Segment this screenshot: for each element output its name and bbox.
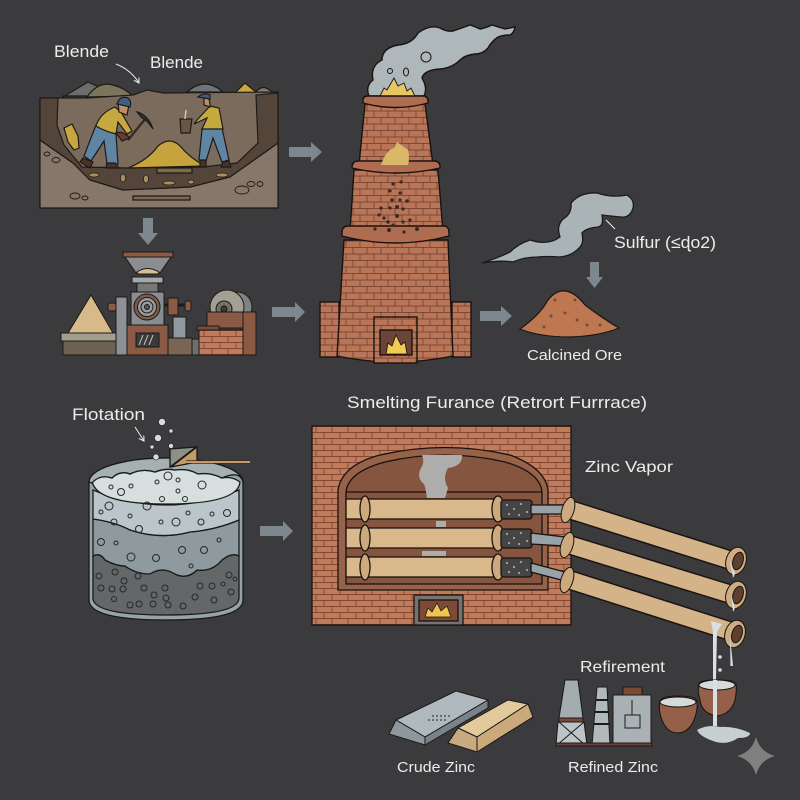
converter tower [556, 680, 587, 745]
middle retort [346, 525, 565, 551]
middle condenser [557, 531, 750, 611]
panel: flotation tank [89, 418, 250, 620]
label: Zinc Vapor: Zinc Vapor [585, 459, 674, 476]
arrow: pit to roaster [289, 142, 322, 162]
smoke bubbles [388, 52, 431, 76]
motor unit [164, 298, 199, 355]
tank shell [89, 458, 243, 620]
planks [133, 168, 192, 200]
panel: retort furnace [312, 426, 571, 625]
chimney column [592, 687, 610, 745]
smoke plume [368, 25, 515, 96]
zinc pour into pot [713, 680, 717, 726]
arch chamber [346, 455, 542, 584]
bubbles [96, 472, 237, 609]
label: Refirement: Refirement [580, 659, 666, 676]
middle layer [93, 519, 239, 576]
base line [556, 743, 652, 746]
sparkle mark [737, 737, 775, 775]
middle tower section [350, 170, 443, 232]
dark rock band [40, 93, 278, 190]
arrow: crusher to roaster [272, 302, 305, 322]
label: Calcined Ore: Calcined Ore [527, 347, 622, 364]
lower condenser [557, 566, 749, 650]
arrow: sulfur to calcined ore [586, 262, 603, 288]
upper tower section [359, 104, 433, 165]
pit ground [40, 90, 278, 208]
heading: smelting furnace: Smelting Furance (Retrort Furrrace) [347, 393, 647, 412]
label: Flotation: Flotation [72, 405, 145, 424]
foam surface [92, 469, 240, 504]
lower retort [346, 554, 565, 581]
sand pile on platform [61, 295, 116, 355]
ore vein [64, 124, 79, 150]
ingot: refined zinc [448, 700, 533, 752]
furnace vapor [419, 455, 462, 556]
arrow: roaster to calcined ore [480, 306, 512, 326]
support column [116, 297, 127, 355]
rim [89, 458, 243, 483]
ore particles [373, 180, 419, 234]
pointer arrow: Blende [116, 64, 139, 83]
foreground soil [40, 140, 278, 208]
lower tower section [337, 240, 453, 362]
puddle [697, 726, 750, 743]
flywheel on brick base [197, 290, 256, 355]
panel: crushing machinery [61, 252, 256, 355]
molten zinc drips [711, 560, 735, 680]
panel: roasting tower [320, 25, 515, 363]
panel: sulfur smoke [482, 193, 633, 263]
label: Blende (second): Blende [150, 53, 203, 72]
upper retort [346, 496, 565, 522]
side walls [320, 302, 471, 357]
distillation cabinet [613, 687, 651, 745]
pebbles [44, 152, 263, 200]
label: Blende (top left): Blende [54, 42, 109, 61]
rising bubbles [150, 418, 174, 460]
spoil heaps [63, 82, 273, 97]
hopper [123, 252, 173, 292]
arch frame [338, 448, 548, 590]
arrow: pit to crusher [138, 218, 158, 245]
chamber line [346, 491, 542, 493]
ring bands [342, 96, 449, 243]
label: Crude Zinc: Crude Zinc [397, 759, 476, 776]
back pot [698, 680, 736, 716]
flames at tower mouth [379, 78, 416, 98]
flame glow [381, 142, 409, 165]
label: Refined Zinc: Refined Zinc [568, 759, 659, 776]
crusher body and wheel [108, 292, 168, 355]
ingot: crude zinc [389, 691, 488, 745]
firebox [374, 317, 417, 363]
pointer: sulfur label [606, 220, 615, 229]
bottom sludge layer [93, 555, 239, 615]
ore heap [128, 141, 205, 168]
firebox [414, 595, 463, 625]
condenser tubes [557, 496, 750, 680]
arrow: flotation to furnace [260, 521, 293, 541]
label: Sulfur: Sulfur (≤ɖo2) [614, 233, 716, 252]
panel: refinement equipment [556, 680, 652, 746]
brick wall [312, 426, 571, 625]
upper condenser [558, 496, 750, 577]
front pot [659, 696, 697, 733]
miner: right with bucket [180, 94, 231, 167]
miner: left with pickaxe [80, 97, 153, 168]
upper layer [93, 490, 239, 536]
panel: mining pit [40, 82, 278, 208]
scoop [170, 447, 250, 467]
clay pots [659, 680, 750, 743]
pointer arrow: Flotation [135, 427, 144, 441]
calcined ore pile [520, 291, 619, 337]
